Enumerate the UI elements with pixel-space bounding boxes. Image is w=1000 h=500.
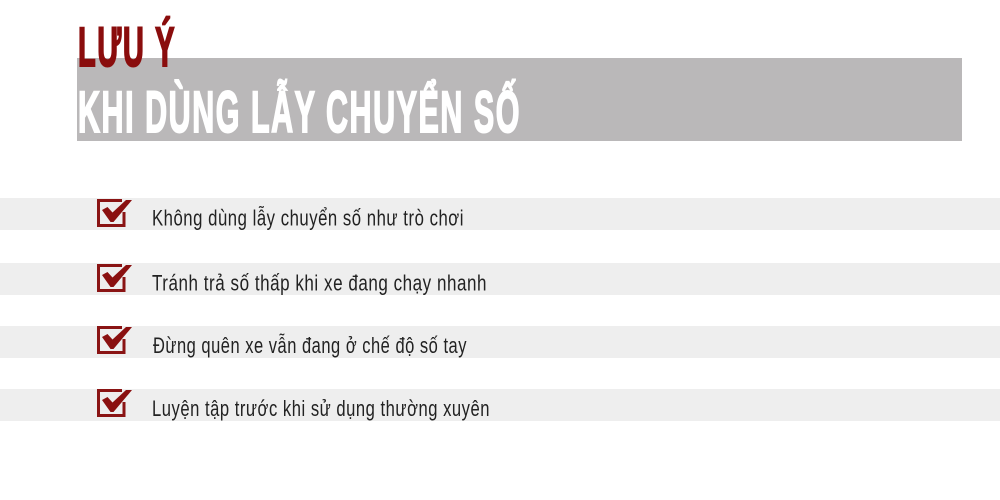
list item 2 bbox=[0, 263, 1000, 296]
list item 1: Không dùng lẫy chuyển số như trò chơi bbox=[152, 206, 464, 230]
heading: KHI DÙNG LẪY CHUYỂN SỐ: KHI DÙNG LẪY CHUYỂN SỐ bbox=[78, 80, 521, 145]
list item 4 bbox=[0, 389, 1000, 421]
list item 1 bbox=[0, 198, 1000, 230]
list item 2: Tránh trả số thấp khi xe đang chạy nhanh bbox=[152, 270, 487, 296]
list item 3 bbox=[0, 326, 1000, 358]
heading: LƯU Ý: LƯU Ý bbox=[78, 15, 176, 78]
list item 3: Đừng quên xe vẫn đang ở chế độ số tay bbox=[153, 333, 467, 358]
list item 4: Luyện tập trước khi sử dụng thường xuyên bbox=[152, 396, 490, 421]
title panel: grey banner bbox=[77, 58, 962, 141]
